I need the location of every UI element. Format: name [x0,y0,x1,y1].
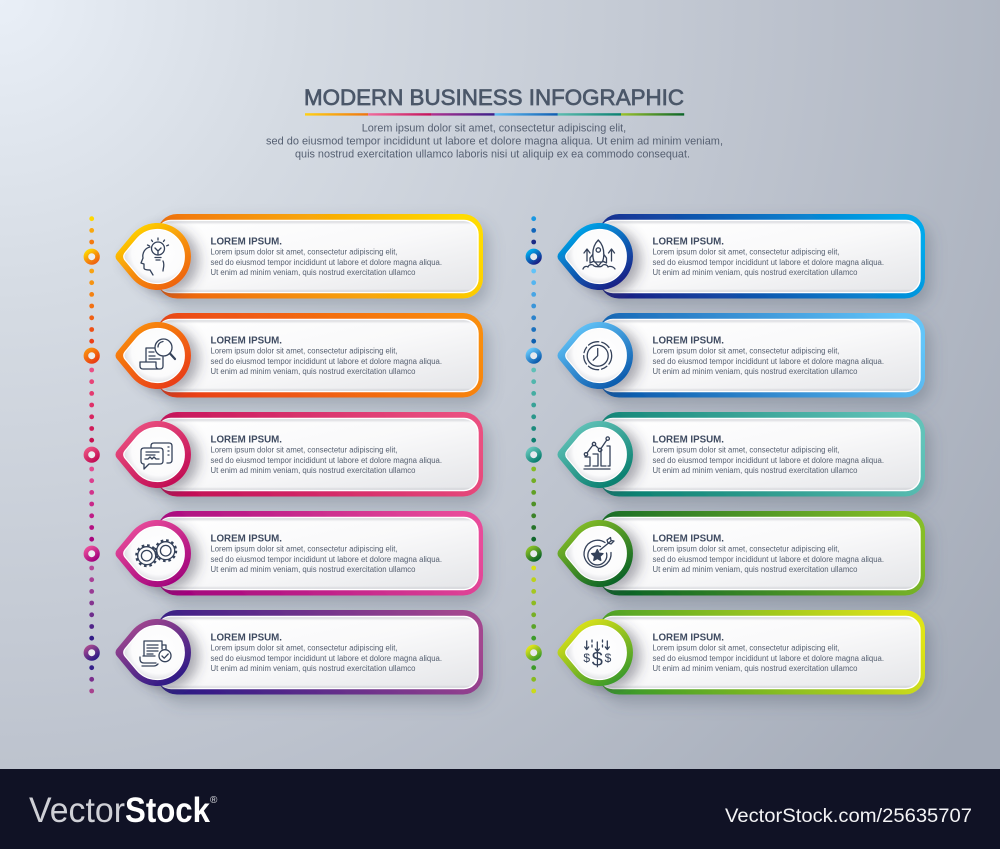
icon: document and magnifier [140,339,175,369]
heading: LOREM IPSUM. [210,533,282,544]
footer logo [29,791,218,830]
body text: Ut enim ad minim veniam, quis nostrud exercitation ullamco [652,565,858,574]
body text: sed do eiusmod tempor incididunt ut labore et dolore magna aliqua. [210,357,442,366]
body text: Lorem ipsum dolor sit amet, consectetur adipiscing elit, [652,643,840,652]
body text [210,544,442,574]
body text [652,643,884,673]
panel: card 3 left [121,412,483,496]
heading: LOREM IPSUM. [210,632,282,643]
icon: falling dollars [583,640,612,671]
footer logo: ® [210,795,218,806]
body text: Lorem ipsum dolor sit amet, consectetur adipiscing elit, [652,247,840,256]
panel: card 4 right [563,511,925,596]
icon: rocket [583,240,615,269]
body text: Ut enim ad minim veniam, quis nostrud exercitation ullamco [210,367,416,376]
body text: Lorem ipsum dolor sit amet, consectetur adipiscing elit, [210,544,398,553]
panel: card 1 right [563,214,925,298]
body text: Lorem ipsum dolor sit amet, consectetur adipiscing elit, [210,346,398,355]
body text [210,346,442,376]
subtitle text: Lorem ipsum dolor sit amet, consectetur adipiscing elit, [362,123,626,135]
icon: falling dollars: $ [605,651,612,665]
body text [210,643,442,673]
footer image id: VectorStock.com/25635707 [725,805,972,827]
icon: growth chart [584,437,610,469]
body text: Lorem ipsum dolor sit amet, consectetur adipiscing elit, [210,643,398,652]
panel: card 5 right [563,610,925,694]
body text: Ut enim ad minim veniam, quis nostrud exercitation ullamco [210,565,416,574]
right timeline dots [528,216,540,693]
body text: Ut enim ad minim veniam, quis nostrud exercitation ullamco [210,268,416,277]
body text: sed do eiusmod tempor incididunt ut labore et dolore magna aliqua. [652,456,884,465]
body text: Ut enim ad minim veniam, quis nostrud exercitation ullamco [210,664,416,673]
icon: falling dollars: $ [583,651,590,665]
footer logo: Stock [125,791,210,830]
title: MODERN BUSINESS INFOGRAPHIC [304,85,684,110]
body text [652,247,884,277]
body text: sed do eiusmod tempor incididunt ut labore et dolore magna aliqua. [210,654,442,663]
icon: falling dollars: $ [592,649,603,671]
body text: sed do eiusmod tempor incididunt ut labore et dolore magna aliqua. [652,258,884,267]
body text: Lorem ipsum dolor sit amet, consectetur adipiscing elit, [210,247,398,256]
body text: Lorem ipsum dolor sit amet, consectetur adipiscing elit, [652,544,840,553]
panel: card 2 right [563,313,925,398]
body text: sed do eiusmod tempor incididunt ut labore et dolore magna aliqua. [652,555,884,564]
icon: target with arrow [584,538,614,567]
heading: LOREM IPSUM. [210,335,282,346]
body text: Ut enim ad minim veniam, quis nostrud exercitation ullamco [210,466,416,475]
body text [210,247,442,277]
icon: clock [584,342,612,370]
body text: sed do eiusmod tempor incididunt ut labore et dolore magna aliqua. [652,357,884,366]
icon: document with check mark [140,641,171,666]
body text: Ut enim ad minim veniam, quis nostrud exercitation ullamco [652,466,858,475]
body text: sed do eiusmod tempor incididunt ut labore et dolore magna aliqua. [210,456,442,465]
heading: LOREM IPSUM. [652,533,724,544]
body text: sed do eiusmod tempor incididunt ut labore et dolore magna aliqua. [652,654,884,663]
heading: LOREM IPSUM. [652,236,724,247]
body text: Lorem ipsum dolor sit amet, consectetur adipiscing elit, [652,445,840,454]
body text [652,544,884,574]
body text: sed do eiusmod tempor incididunt ut labore et dolore magna aliqua. [210,258,442,267]
body text: Lorem ipsum dolor sit amet, consectetur adipiscing elit, [210,445,398,454]
subtitle text: quis nostrud exercitation ullamco laboris nisi ut aliquip ex ea commodo consequat. [295,149,690,161]
footer bar [0,769,1000,849]
heading: LOREM IPSUM. [210,236,282,247]
panel: card 5 left [121,610,483,694]
body text [652,346,884,376]
body text [652,445,884,475]
body text: Ut enim ad minim veniam, quis nostrud exercitation ullamco [652,367,858,376]
heading: LOREM IPSUM. [652,632,724,643]
body text: Lorem ipsum dolor sit amet, consectetur adipiscing elit, [652,346,840,355]
icon: chat bubbles [141,443,172,469]
icon: head with light bulb [141,238,168,275]
body text: Ut enim ad minim veniam, quis nostrud exercitation ullamco [652,664,858,673]
body text: sed do eiusmod tempor incididunt ut labore et dolore magna aliqua. [210,555,442,564]
heading: LOREM IPSUM. [652,434,724,445]
subtitle text: sed do eiusmod tempor incididunt ut labore et dolore magna aliqua. Ut enim ad minim veniam, [266,136,723,148]
title underline [305,113,684,116]
panel: card 4 left [121,511,483,596]
subtitle text [266,123,723,161]
footer logo: Vector [29,791,125,830]
panel: card 2 left [121,313,483,398]
body text [210,445,442,475]
heading: LOREM IPSUM. [652,335,724,346]
left timeline dots [86,216,97,693]
body text: Ut enim ad minim veniam, quis nostrud exercitation ullamco [652,268,858,277]
panel: card 3 right [563,412,925,496]
heading: LOREM IPSUM. [210,434,282,445]
panel: card 1 left [121,214,483,298]
icon: gears [136,540,176,566]
